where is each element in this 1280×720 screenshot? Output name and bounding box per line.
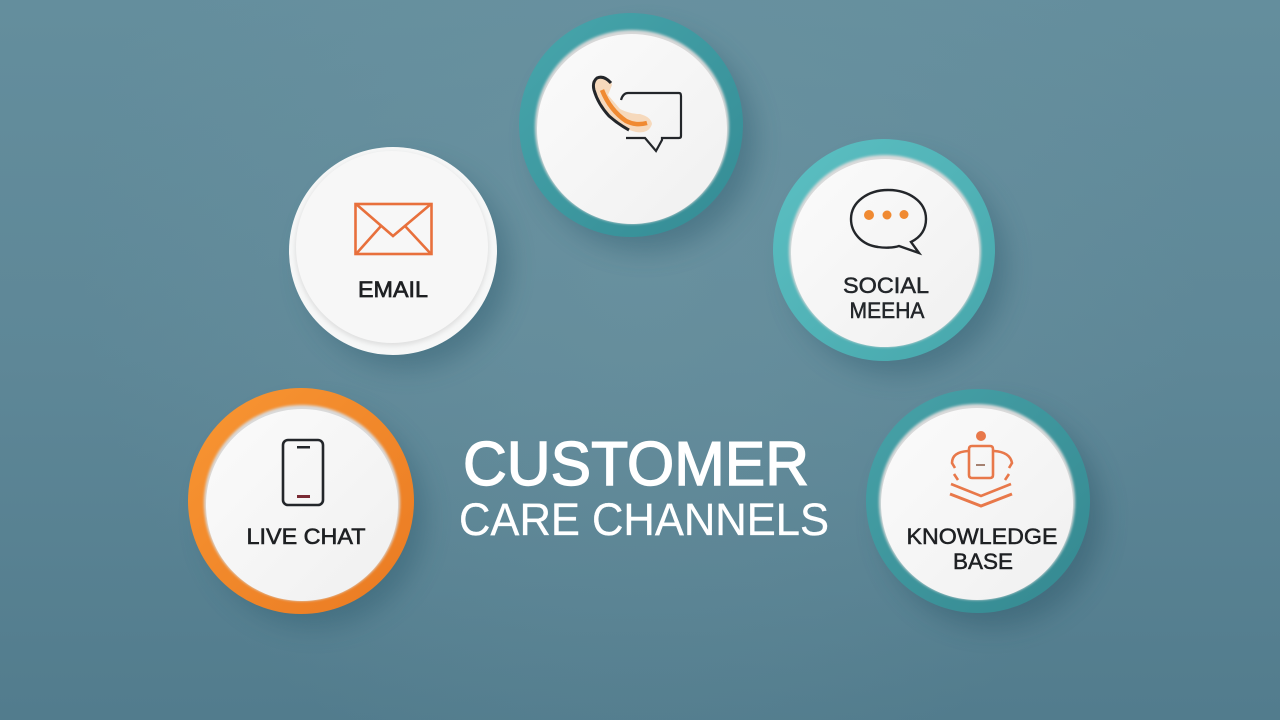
title: CARE CHANNELS bbox=[459, 494, 829, 545]
icon: knowledge book bbox=[950, 431, 1012, 506]
icon: speech bubble with dots bbox=[851, 190, 926, 253]
label: knowledge base: BASE bbox=[953, 549, 1013, 574]
label: social media: MEEHA bbox=[850, 298, 925, 323]
label: email: EMAIL bbox=[358, 277, 428, 302]
title bbox=[459, 430, 829, 545]
panel: live chat channel bbox=[188, 388, 425, 627]
title: CUSTOMER bbox=[463, 430, 809, 499]
icon: envelope bbox=[356, 204, 432, 254]
label: knowledge base bbox=[906, 524, 1058, 574]
label: knowledge base: KNOWLEDGE bbox=[906, 524, 1058, 549]
panel: email channel bbox=[289, 147, 509, 368]
label: social media: SOCIAL bbox=[843, 273, 929, 298]
panel: knowledge base channel bbox=[866, 389, 1102, 627]
panel: social media channel bbox=[773, 139, 1006, 374]
icon: phone and speech bubble bbox=[593, 77, 681, 151]
icon: mobile phone bbox=[283, 440, 323, 505]
panel: phone channel bbox=[519, 13, 755, 251]
label: social media bbox=[843, 273, 929, 323]
label: live chat: LIVE CHAT bbox=[246, 524, 366, 549]
